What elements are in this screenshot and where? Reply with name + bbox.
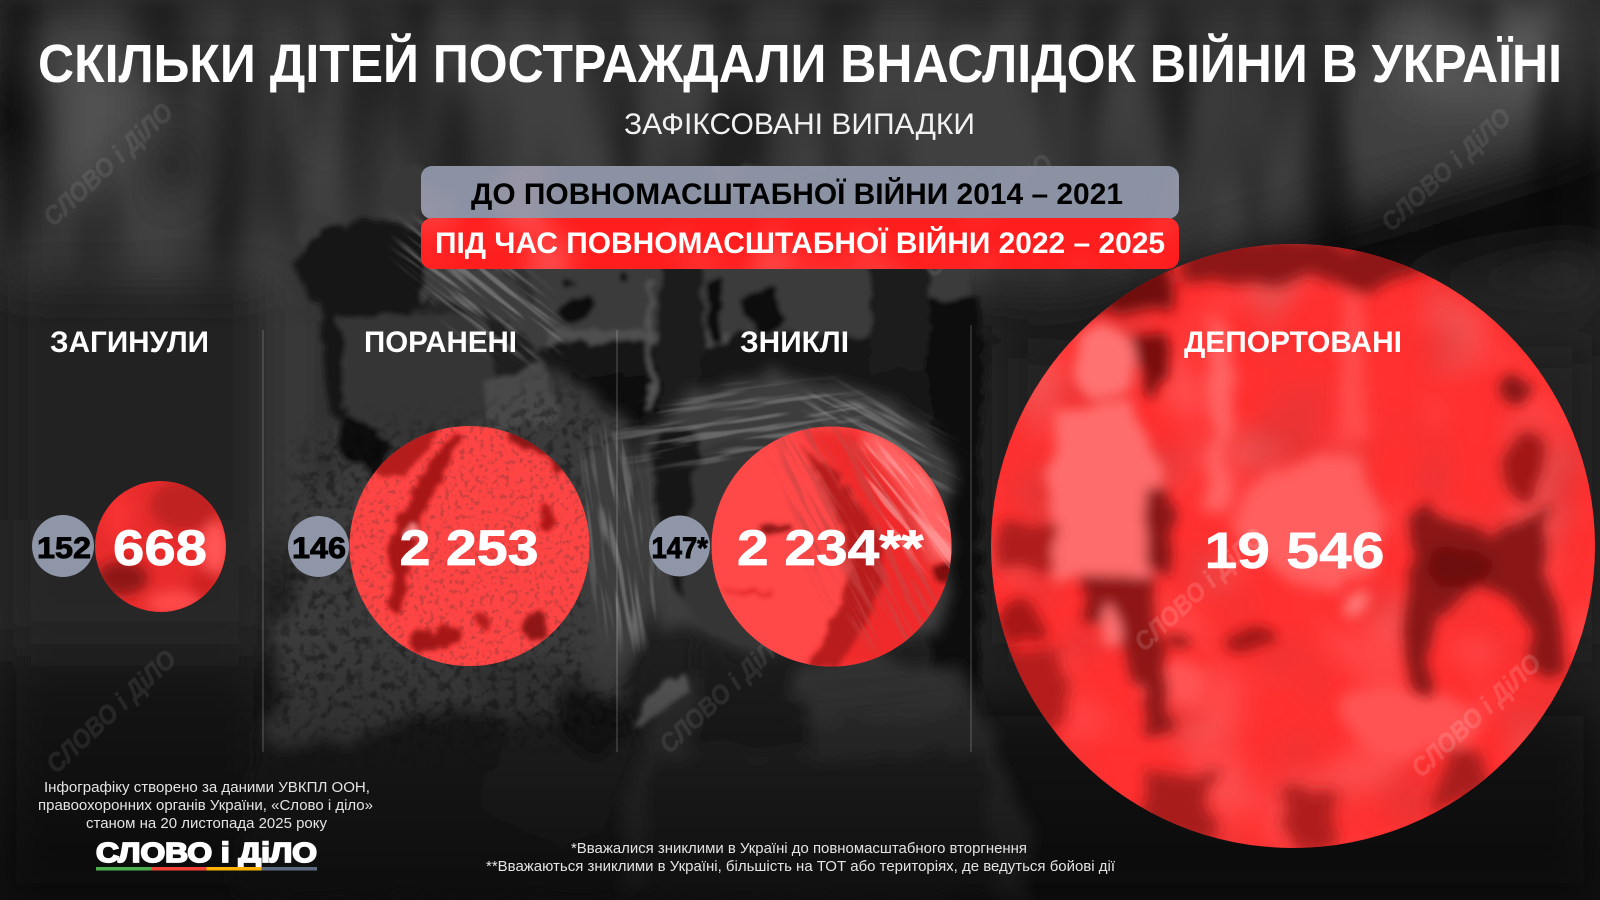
subtitle: ЗАФІКСОВАНІ ВИПАДКИ bbox=[624, 108, 975, 141]
label: missing: ЗНИКЛІ bbox=[740, 326, 849, 359]
watermark on bubble bbox=[1128, 522, 1547, 783]
legend: before the full-scale war bbox=[421, 166, 1179, 219]
footnotes: *Вважалися зниклими в Україні до повномасштабного вторгнення bbox=[571, 841, 1027, 857]
bubble: missing during the war bbox=[712, 426, 952, 666]
value: wounded before the war: 146 bbox=[292, 532, 346, 565]
label: deported: ДЕПОРТОВАНІ bbox=[1184, 326, 1402, 359]
watermark on bubble: СЛОВО і ДіЛО bbox=[1405, 648, 1547, 783]
source note: Інфографіку створено за даними УВКПЛ ООН, bbox=[44, 780, 370, 796]
source note: правоохоронних органів України, «Слово і діло» bbox=[38, 798, 373, 814]
vertical streaks in the blurred upper backdrop bbox=[0, 0, 1600, 330]
value: missing before the war: 147* bbox=[652, 532, 708, 565]
value: killed during the war: 668 bbox=[113, 520, 207, 576]
footnotes bbox=[486, 841, 1115, 875]
source note: станом на 20 листопада 2025 року bbox=[86, 816, 328, 832]
watermarks: СЛОВО і ДіЛО bbox=[917, 148, 1059, 283]
long hair strands bbox=[611, 370, 869, 480]
bubble: killed during the war bbox=[95, 479, 229, 615]
source note bbox=[38, 780, 373, 832]
watermarks: СЛОВО і ДіЛО bbox=[40, 644, 182, 779]
watermarks: СЛОВО і ДіЛО bbox=[653, 624, 795, 759]
legend: during the full-scale war: ПІД ЧАС ПОВНОМАСШТАБНОЇ ВІЙНИ 2022 – 2025 bbox=[435, 226, 1165, 260]
value: killed before the war: 152 bbox=[37, 532, 91, 565]
watermarks bbox=[37, 97, 1517, 779]
bubble: missing before the war bbox=[649, 516, 710, 576]
value: deported: 19 546 bbox=[1204, 522, 1384, 579]
girl with long hair bbox=[570, 367, 1030, 900]
hair strands bbox=[379, 198, 581, 382]
column dividers bbox=[263, 325, 971, 752]
value: missing during the war: 2 234** bbox=[737, 520, 924, 576]
footnotes: **Вважаються зниклими в Україні, більшість на ТОТ або територіях, де ведуться бойові дії bbox=[486, 859, 1115, 875]
legend: before the full-scale war: ДО ПОВНОМАСШТАБНОЇ ВІЙНИ 2014 – 2021 bbox=[471, 177, 1123, 211]
bubble: wounded before the war bbox=[288, 516, 349, 577]
legend: during the full-scale war bbox=[421, 218, 1179, 269]
watermarks: СЛОВО і ДіЛО bbox=[37, 97, 179, 232]
label: wounded: ПОРАНЕНІ bbox=[364, 326, 517, 359]
label: killed: ЗАГИНУЛИ bbox=[50, 326, 209, 359]
watermark on bubble: СЛОВО і ДіЛО bbox=[1128, 522, 1270, 657]
logo: Слово і діло: СЛОВО і ДіЛО bbox=[96, 837, 317, 868]
column: missing bbox=[649, 331, 952, 666]
watermarks: СЛОВО і ДіЛО bbox=[1375, 102, 1517, 237]
dark vignette towards the bottom bbox=[0, 640, 1600, 900]
building wall behind the girls bbox=[530, 170, 985, 720]
column: killed bbox=[32, 326, 229, 615]
bubble: wounded during the war bbox=[350, 426, 590, 666]
value: wounded during the war: 2 253 bbox=[400, 520, 538, 576]
knitted coat texture bbox=[260, 380, 630, 740]
column: wounded bbox=[288, 326, 590, 666]
bubble: deported during the war bbox=[991, 235, 1595, 850]
girl with bobble hat bbox=[230, 168, 640, 900]
bubble: killed before the war bbox=[32, 515, 94, 577]
